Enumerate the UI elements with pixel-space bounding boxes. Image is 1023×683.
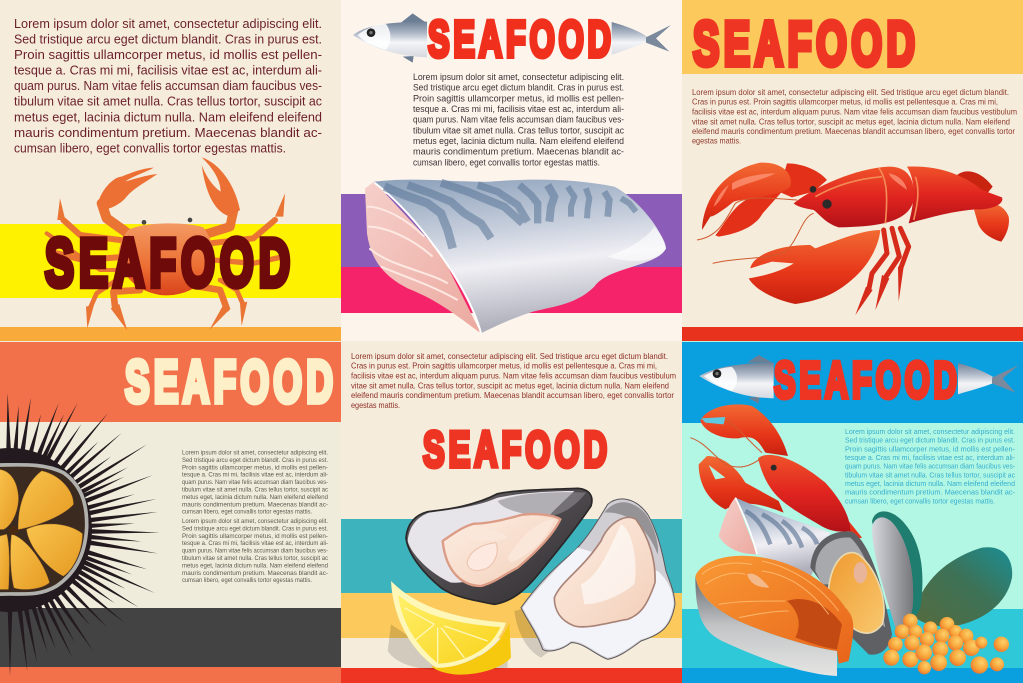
panel: crab poster — [0, 0, 341, 341]
icon: lobster — [690, 404, 862, 541]
text block: urchin poster: tesque a. Cras mi mi, facilisis vitae est ac, interdum ali- — [182, 472, 328, 479]
text block: urchin poster: cumsan libero, eget convallis tortor egestas mattis. — [182, 509, 312, 516]
icon: fish fillet — [365, 180, 666, 333]
illustration: seafood group — [690, 404, 1012, 676]
panel: sea urchin poster — [0, 341, 341, 683]
title: SEAFOOD: SEAFOOD — [125, 350, 337, 415]
title: SEAFOOD: SEAFOOD — [45, 225, 295, 301]
title: SEAFOOD: SEAFOOD — [774, 352, 961, 409]
icon: mackerel fish — [699, 355, 1019, 404]
text block: oyster poster: egestas mattis. — [351, 400, 400, 410]
text block: fillet poster: Sed tristique arcu eget dictum blandit. Cras in purus est. — [413, 83, 624, 93]
text block: oyster poster: facilisis vitae est ac, interdum aliquam purus. Nam vitae felis accumsan diam faucibus vestibulum — [351, 370, 676, 380]
text block: crab poster: cumsan libero, eget convallis tortor egestas mattis. — [14, 142, 286, 156]
text block: oyster poster — [351, 351, 676, 410]
text block: oyster poster: eleifend mauris condimentum pretium. Maecenas blandit accumsan libero, eget convallis tortor — [351, 390, 674, 400]
title: SEAFOOD: SEAFOOD — [428, 11, 615, 68]
text block: fillet poster: tibulum vitae sit amet nulla. Cras tellus tortor, suscipit ac — [413, 125, 625, 135]
panel: fish fillet poster — [341, 0, 682, 341]
icon: crab — [47, 157, 285, 331]
text block: urchin poster: metus eget, lacinia dictum nulla. Nam eleifend eleifend — [182, 562, 328, 569]
text block: lobster poster: Cras in purus est. Proin sagittis ullamcorper metus, id mollis est pellentesque a. Cras mi mi, — [692, 97, 998, 107]
text block: urchin poster: mauris condimentum pretium. Maecenas blandit ac- — [182, 501, 328, 508]
text block: mixed poster: Proin sagittis ullamcorper metus, id mollis est pellen- — [845, 444, 1015, 453]
text block: urchin poster: Sed tristique arcu eget dictum blandit. Cras in purus est. — [182, 525, 328, 532]
text block: urchin poster: cumsan libero, eget convallis tortor egestas mattis. — [182, 577, 312, 584]
text block: crab poster: Sed tristique arcu eget dictum blandit. Cras in purus est. — [14, 32, 322, 46]
icon: mackerel fish — [353, 13, 671, 63]
text block: fillet poster: Lorem ipsum dolor sit amet, consectetur adipiscing elit. — [413, 72, 624, 82]
text block: lobster poster: egestas mattis. — [692, 136, 741, 146]
text block: urchin poster: Sed tristique arcu eget dictum blandit. Cras in purus est. — [182, 457, 328, 464]
text block: crab poster: tesque a. Cras mi mi, facilisis vitae est ac, interdum ali- — [14, 64, 322, 78]
text block: fillet poster: cumsan libero, eget convallis tortor egestas mattis. — [413, 157, 600, 167]
text block: mixed poster: cumsan libero, eget convallis tortor egestas mattis. — [845, 496, 995, 505]
text block: urchin poster: Proin sagittis ullamcorper metus, id mollis est pellen- — [182, 533, 328, 540]
text block: oyster poster: Lorem ipsum dolor sit amet, consectetur adipiscing elit. Sed tristique arcu eget dictum blandit. — [351, 351, 668, 361]
text block: mixed poster: mauris condimentum pretium. Maecenas blandit ac- — [845, 488, 1015, 497]
icon: closed green mussel — [914, 547, 1012, 626]
text block: crab poster: tibulum vitae sit amet nulla. Cras tellus tortor, suscipit ac — [14, 95, 322, 109]
text block: fillet poster: tesque a. Cras mi mi, facilisis vitae est ac, interdum ali- — [413, 104, 624, 114]
text block: urchin poster: tibulum vitae sit amet nulla. Cras tellus tortor, suscipit ac — [182, 486, 329, 494]
icon: salmon steak — [695, 556, 853, 676]
text block: crab poster: quam purus. Nam vitae felis accumsan diam faucibus ves- — [14, 79, 322, 93]
panel: oyster poster — [341, 341, 682, 683]
text block: urchin poster: metus eget, lacinia dictum nulla. Nam eleifend eleifend — [182, 494, 328, 501]
text block: urchin poster: Lorem ipsum dolor sit amet, consectetur adipiscing elit. — [182, 450, 328, 456]
text block: urchin poster: Lorem ipsum dolor sit amet, consectetur adipiscing elit. — [182, 518, 328, 525]
text block: urchin poster — [182, 450, 329, 584]
text block: oyster poster: vitae sit amet nulla. Cras tellus tortor, suscipit ac metus eget, lacinia dictum nulla. Nam eleifend — [351, 380, 669, 390]
text block: mixed poster — [845, 427, 1015, 505]
title: SEAFOOD: SEAFOOD — [423, 421, 611, 477]
text block: crab poster — [14, 17, 322, 156]
text block: crab poster: mauris condimentum pretium. Maecenas blandit ac- — [14, 126, 322, 140]
text block: lobster poster — [692, 87, 1017, 146]
text block: urchin poster: quam purus. Nam vitae felis accumsan diam faucibus ves- — [182, 548, 328, 555]
icon: sea urchin — [0, 393, 160, 676]
text block: fillet poster: quam purus. Nam vitae felis accumsan diam faucibus ves- — [413, 115, 624, 125]
text block: urchin poster: tesque a. Cras mi mi, facilisis vitae est ac, interdum ali- — [182, 540, 328, 547]
icon: salmon roe — [883, 614, 1009, 674]
icon: lobster — [697, 163, 1009, 315]
icon: oysters and lemon — [388, 488, 675, 675]
panel: mixed seafood poster — [682, 341, 1023, 683]
text block: crab poster: Lorem ipsum dolor sit amet, consectetur adipiscing elit. — [14, 17, 322, 31]
text block: urchin poster: mauris condimentum pretium. Maecenas blandit ac- — [182, 570, 328, 577]
text block: urchin poster: tibulum vitae sit amet nulla. Cras tellus tortor, suscipit ac — [182, 555, 329, 562]
text block: fillet poster: metus eget, lacinia dictum nulla. Nam eleifend eleifend — [413, 136, 624, 146]
icon: fish fillet — [719, 498, 830, 578]
text block: crab poster: metus eget, lacinia dictum nulla. Nam eleifend eleifend — [14, 110, 322, 124]
title: SEAFOOD: SEAFOOD — [693, 10, 919, 79]
text block: oyster poster: Cras in purus est. Proin sagittis ullamcorper metus, id mollis est pellentesque a. Cras mi mi, — [351, 361, 657, 371]
text block: urchin poster: Proin sagittis ullamcorper metus, id mollis est pellen- — [182, 464, 328, 471]
icon: open mussel shell — [810, 511, 922, 655]
text block: fillet poster: mauris condimentum pretium. Maecenas blandit ac- — [413, 147, 624, 157]
text block: urchin poster: quam purus. Nam vitae felis accumsan diam faucibus ves- — [182, 479, 328, 486]
text block: fillet poster — [413, 72, 625, 167]
text block: fillet poster: Proin sagittis ullamcorper metus, id mollis est pellen- — [413, 93, 624, 103]
text block: crab poster: Proin sagittis ullamcorper metus, id mollis est pellen- — [14, 48, 322, 62]
panel: lobster poster — [682, 0, 1023, 341]
